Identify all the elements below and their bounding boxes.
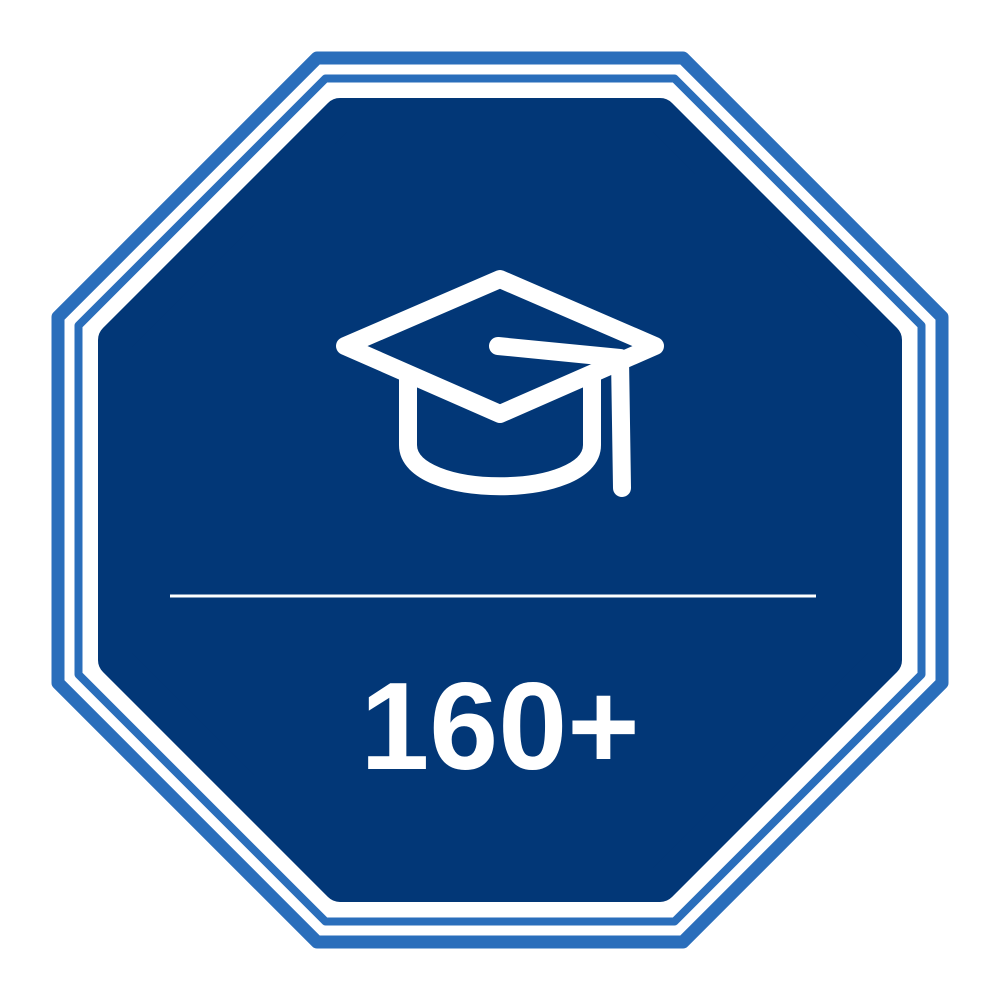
icon: graduation cap <box>345 279 655 488</box>
stat number: 160+ <box>360 658 640 796</box>
outer blue octagon ring <box>58 58 942 942</box>
inner blue octagon ring <box>78 78 922 922</box>
dark octagon panel <box>115 115 885 885</box>
divider <box>170 594 816 598</box>
